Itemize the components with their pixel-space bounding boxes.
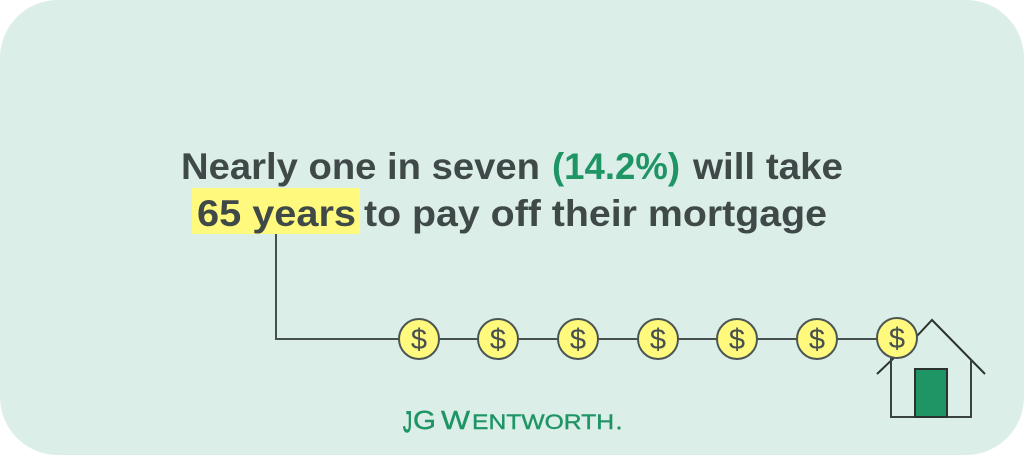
coin 3 [558, 319, 598, 359]
coin 1: $ [411, 324, 427, 356]
coin 5 [717, 319, 757, 359]
coin 1 [399, 319, 439, 359]
connector line [276, 234, 897, 339]
headline: 65 years [197, 193, 356, 234]
coin 6 [797, 319, 837, 359]
headline: will take [692, 146, 843, 187]
coin 4: $ [650, 324, 666, 356]
headline: to pay off their mortgage [364, 193, 827, 234]
headline [181, 146, 843, 234]
coin 5: $ [729, 324, 745, 356]
logo: W [441, 405, 471, 435]
logo: ENTWORTH [472, 411, 614, 434]
coin 6: $ [809, 324, 825, 356]
headline: (14.2%) [552, 146, 680, 187]
icon: house [877, 320, 985, 417]
coins [399, 318, 917, 359]
logo: G [413, 405, 436, 435]
coin 2: $ [490, 324, 506, 356]
highlight behind 65 years [192, 188, 360, 234]
coin 4 [638, 319, 678, 359]
logo [403, 405, 620, 439]
coin 7 [877, 318, 917, 358]
headline: Nearly one in seven [181, 146, 540, 187]
coin 2 [478, 319, 518, 359]
coin 3: $ [570, 324, 586, 356]
coin 7: $ [889, 323, 905, 355]
logo: J [403, 406, 412, 439]
